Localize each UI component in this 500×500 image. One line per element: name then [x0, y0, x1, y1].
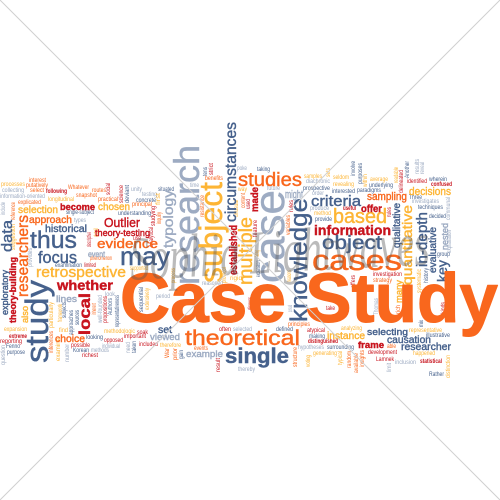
- medium words: evaluative: [428, 227, 439, 273]
- medium words: single: [225, 345, 289, 368]
- medium words: become: [60, 202, 95, 213]
- small background words: reporting: [0, 339, 22, 345]
- small background words: routes: [92, 188, 106, 194]
- small background words: find: [59, 328, 68, 334]
- small background words: prospective: [303, 186, 331, 192]
- small background words: extensively: [145, 288, 151, 310]
- small background words: benefits: [205, 176, 223, 182]
- medium words: instance: [327, 331, 365, 342]
- medium words: may: [120, 241, 170, 271]
- small background words: produce: [310, 206, 330, 212]
- small background words: hypotheses: [298, 345, 324, 351]
- small background words: tens: [203, 167, 209, 176]
- small background words: illustrative: [426, 333, 451, 339]
- small background words: richest: [82, 353, 98, 359]
- small background words: putatively: [26, 183, 48, 189]
- medium words: quantitative: [399, 205, 415, 285]
- small background words: processes: [1, 182, 25, 188]
- small background words: extreme: [9, 334, 28, 340]
- small background words: within: [363, 174, 369, 188]
- medium words: many: [394, 279, 404, 303]
- small background words: single-subject: [66, 210, 94, 216]
- small background words: development: [368, 350, 397, 356]
- small background words: Lamnek: [376, 357, 395, 363]
- small background words: purposes: [358, 163, 364, 184]
- small background words: offers: [351, 275, 357, 288]
- medium words: qualitative: [392, 203, 403, 248]
- small background words: number: [65, 344, 71, 362]
- medium words: offer: [361, 204, 382, 215]
- small background words: future: [267, 186, 281, 192]
- small background words: communal: [446, 197, 452, 220]
- small background words: important: [124, 334, 146, 340]
- small background words: inquiry: [157, 212, 163, 224]
- small background words: studying: [151, 206, 157, 226]
- small background words: possible: [71, 343, 91, 349]
- medium words: based: [333, 206, 387, 228]
- medium words: viewed: [150, 332, 180, 343]
- small background words: inferences: [49, 331, 55, 353]
- small background words: Fenno: [6, 344, 21, 350]
- small background words: mix: [419, 320, 425, 327]
- small background words: collecting: [2, 188, 24, 194]
- small background words: prior: [173, 348, 179, 360]
- medium words: retrospective: [36, 264, 126, 281]
- small background words: purpose: [7, 350, 26, 356]
- small background words: Korean: [73, 348, 89, 354]
- small background words: pursued: [288, 305, 294, 312]
- small background words: order: [312, 191, 324, 197]
- small background words: diachronic: [306, 179, 330, 185]
- small background words: investigates: [412, 199, 439, 205]
- medium words: also: [20, 306, 30, 323]
- medium words: study: [19, 280, 55, 363]
- medium words: evidence: [97, 236, 158, 251]
- small background words: wherein: [428, 177, 447, 183]
- small background words: distinction: [446, 355, 452, 378]
- small background words: reveal: [420, 162, 426, 174]
- small background words: generating: [313, 351, 337, 357]
- small background words: testing: [142, 192, 157, 198]
- small background words: sequential: [139, 287, 145, 312]
- small background words: first: [156, 193, 162, 205]
- small background words: sources: [75, 310, 81, 325]
- small background words: principal: [132, 202, 152, 208]
- small background words: structure: [293, 346, 299, 367]
- small background words: Whatever: [68, 185, 89, 191]
- small background words: individual: [102, 344, 120, 350]
- medium words: theoretical: [185, 327, 300, 350]
- medium words: local: [77, 293, 94, 335]
- medium words: focus: [38, 248, 77, 267]
- small background words: selected: [233, 327, 252, 333]
- medium words: established: [228, 225, 240, 275]
- medium words: information: [314, 222, 391, 238]
- small background words: well-founded: [98, 295, 104, 324]
- small background words: situated: [158, 187, 174, 193]
- small background words: look: [105, 292, 116, 298]
- small background words: social: [106, 183, 112, 195]
- small background words: phenomenon: [90, 256, 112, 262]
- small background words: Another: [405, 161, 411, 178]
- small background words: use: [133, 236, 142, 242]
- medium words: exploratory: [0, 270, 10, 315]
- small background words: propositions: [103, 296, 109, 323]
- small background words: strategy: [373, 278, 392, 284]
- small background words: thereby: [238, 367, 255, 373]
- medium words: set: [158, 325, 172, 336]
- small background words: sets: [326, 168, 332, 177]
- small background words: events: [194, 346, 208, 352]
- small background words: explanation: [447, 230, 453, 253]
- small background words: delineated: [399, 170, 405, 193]
- small background words: underlying: [369, 183, 393, 189]
- small background words: Authors: [108, 298, 114, 315]
- medium words: made: [250, 187, 261, 212]
- medium words: object: [322, 233, 383, 254]
- small background words: detail: [94, 228, 100, 237]
- medium words: theory-building: [8, 257, 18, 323]
- medium words: selection: [18, 205, 58, 216]
- small background words: include: [1, 202, 7, 215]
- small background words: reasoned: [202, 281, 223, 287]
- medium words: researchers: [15, 215, 32, 297]
- small background words: random: [347, 351, 353, 368]
- medium words: decisions: [409, 186, 451, 198]
- small background words: protocol: [222, 267, 228, 283]
- small background words: reasons: [287, 270, 293, 282]
- small background words: concrete: [136, 198, 157, 204]
- medium words: in-depth: [414, 212, 431, 267]
- small background words: rules: [387, 207, 393, 217]
- small background words: confused: [431, 182, 452, 188]
- medium words: event: [88, 250, 106, 259]
- medium words: approach: [29, 214, 72, 226]
- small background words: typical: [338, 351, 344, 365]
- small background words: examine: [56, 337, 62, 361]
- small background words: involve: [351, 160, 357, 176]
- small background words: way: [237, 187, 247, 193]
- small background words: opposed: [104, 338, 123, 344]
- small background words: framework: [58, 303, 64, 322]
- small background words: [0, 159, 453, 378]
- medium words: might: [285, 189, 303, 201]
- small background words: interest: [29, 178, 46, 184]
- medium words: thus: [30, 227, 77, 254]
- small background words: method: [314, 211, 331, 217]
- small background words: practical: [98, 197, 118, 203]
- small background words: kinds: [441, 302, 447, 314]
- medium words: multiple: [236, 217, 257, 285]
- medium words: theory-testing: [95, 228, 150, 238]
- small background words: take: [326, 306, 336, 312]
- small background words: average: [370, 177, 389, 183]
- small background words: rules: [289, 200, 295, 212]
- medium words: lines: [56, 294, 78, 304]
- small background words: content: [241, 193, 247, 208]
- medium words: sampling: [367, 191, 407, 203]
- small background words: making: [309, 334, 325, 340]
- medium words: [0, 122, 452, 368]
- small background words: inherent: [92, 303, 98, 315]
- small background words: longitudinal: [48, 197, 74, 203]
- small background words: readable: [394, 167, 400, 183]
- small background words: feature: [253, 219, 259, 237]
- small background words: types: [74, 218, 86, 224]
- small background words: approaches: [69, 310, 75, 335]
- small background words: discuss: [248, 297, 254, 310]
- medium words: example: [186, 349, 223, 360]
- medium words: case: [246, 190, 294, 283]
- small background words: time: [190, 183, 200, 189]
- small background words: systematic: [417, 269, 423, 293]
- small background words: question: [1, 345, 7, 365]
- small background words: science: [119, 184, 125, 203]
- small background words: voting: [306, 355, 312, 367]
- small background words: descriptive: [87, 232, 93, 247]
- small background words: process: [171, 268, 177, 283]
- medium words: studies: [238, 170, 302, 191]
- medium words: Outlier: [104, 216, 140, 230]
- small background words: able: [387, 344, 397, 350]
- medium words: whether: [56, 278, 114, 293]
- medium words: researcher: [401, 342, 452, 353]
- small background words: limited: [84, 263, 96, 269]
- small background words: reference: [11, 202, 17, 220]
- small background words: provide: [315, 217, 333, 223]
- small background words: expansion: [4, 327, 27, 333]
- small background words: analyzing: [341, 326, 362, 332]
- medium words: nested: [440, 223, 450, 250]
- small background words: Three: [409, 195, 423, 201]
- medium words: choice: [55, 334, 85, 345]
- medium words: circumstances: [223, 122, 240, 222]
- medium words: criteria: [311, 193, 362, 210]
- small background words: investigation: [373, 272, 402, 278]
- small background words: statistical: [420, 359, 442, 365]
- small background words: explicated: [18, 200, 41, 206]
- small background words: taken: [132, 341, 138, 353]
- small background words: revealing: [333, 182, 354, 188]
- small background words: supported: [130, 266, 148, 272]
- small background words: representativeness: [115, 295, 121, 327]
- small background words: unusual: [234, 200, 240, 217]
- small background words: often: [219, 327, 231, 333]
- small background words: looking: [86, 335, 103, 341]
- medium words: causation: [387, 335, 431, 346]
- medium words: cases: [312, 245, 402, 277]
- medium words: frame: [358, 340, 384, 351]
- small background words: therefore: [160, 343, 182, 349]
- small background words: resistance: [200, 194, 206, 217]
- small background words: principles: [288, 322, 310, 328]
- small background words: samples: [304, 174, 322, 180]
- small background words: following: [46, 189, 67, 195]
- small background words: provides: [28, 248, 34, 267]
- medium words: subject: [193, 182, 229, 283]
- small background words: select: [30, 188, 44, 194]
- small background words: suggestion: [11, 224, 17, 250]
- small background words: seldom: [333, 175, 349, 181]
- small background words: included: [139, 342, 158, 348]
- medium words: research: [166, 145, 207, 285]
- small background words: paradigms: [357, 188, 381, 194]
- small background words: history: [424, 268, 430, 283]
- small background words: analytical: [149, 227, 155, 247]
- small background words: strict: [209, 163, 215, 175]
- small background words: representative: [409, 328, 443, 334]
- small background words: information-oriented: [0, 194, 45, 200]
- small background words: poke: [237, 166, 248, 172]
- small background words: limit: [387, 363, 393, 372]
- small background words: understanding: [118, 211, 151, 217]
- small background words: Rather: [429, 372, 444, 378]
- medium words: historical: [45, 224, 87, 235]
- small background words: surrounding: [327, 345, 354, 351]
- small background words: gain: [179, 350, 185, 359]
- small background words: taking: [257, 167, 270, 173]
- small background words: rich: [396, 305, 402, 314]
- small background words: methods: [91, 348, 109, 354]
- medium words: selecting: [367, 327, 408, 338]
- small background words: snapshot: [76, 193, 97, 199]
- small background words: result: [216, 358, 222, 372]
- small background words: unity: [131, 187, 142, 193]
- small background words: Thomas: [374, 298, 380, 315]
- small background words: inclusion: [395, 360, 416, 366]
- medium words: knowledge: [286, 198, 313, 322]
- small background words: decided: [429, 214, 446, 220]
- small background words: examination: [55, 263, 82, 269]
- medium words: chosen: [98, 202, 130, 213]
- small background words: happened: [413, 351, 435, 357]
- small background words: defined: [276, 327, 293, 333]
- small background words: atypical: [307, 328, 325, 334]
- small background words: soak: [137, 330, 149, 336]
- small background words: results: [415, 159, 421, 174]
- small background words: identified: [407, 179, 427, 185]
- small background words: subjects: [62, 302, 68, 318]
- medium words: typology: [160, 190, 176, 248]
- small background words: period: [156, 294, 170, 300]
- small background words: techniques: [418, 205, 443, 211]
- small background words: fitting: [255, 250, 261, 257]
- small background words: insights: [360, 350, 366, 367]
- small background words: interested: [332, 189, 355, 195]
- title: Case Study: Case Study: [120, 259, 498, 337]
- small background words: particularly: [49, 302, 55, 328]
- small background words: methodologic: [104, 329, 135, 335]
- small background words: deviant: [125, 185, 131, 203]
- small background words: explanatory: [256, 260, 262, 277]
- medium words: key: [434, 260, 450, 282]
- small background words: available: [354, 352, 360, 373]
- small background words: distinguished: [308, 339, 338, 345]
- small background words: group: [437, 252, 451, 258]
- small background words: variables: [286, 215, 292, 235]
- small background words: War: [165, 348, 171, 358]
- small background words: rigid: [230, 276, 242, 282]
- small background words: used: [246, 199, 252, 209]
- small background words: useful: [343, 206, 356, 212]
- small background words: need: [126, 342, 132, 353]
